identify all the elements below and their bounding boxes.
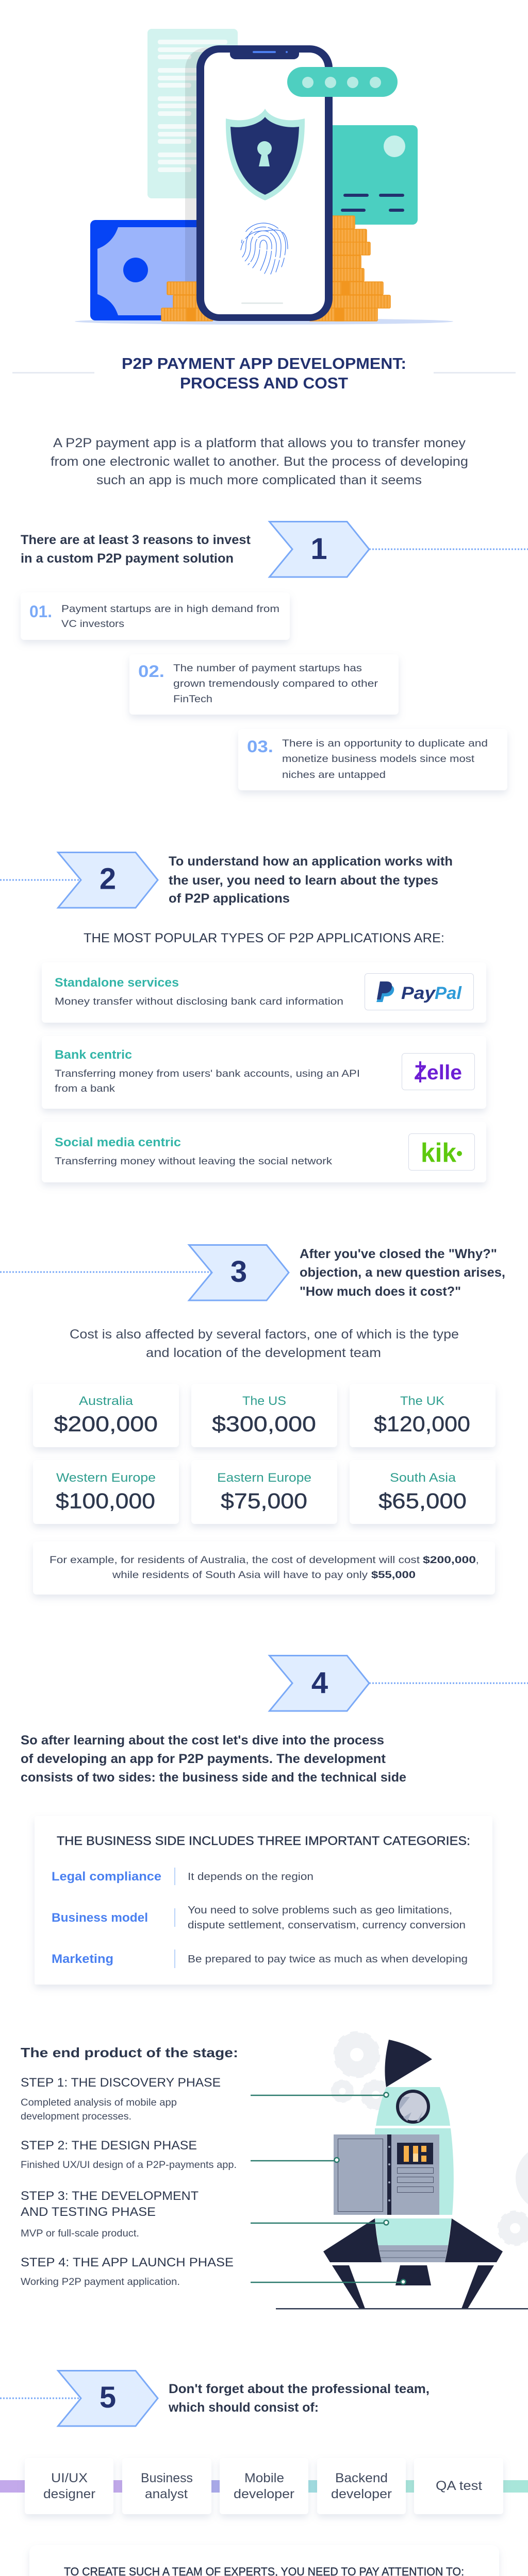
passcode pill (287, 67, 398, 97)
reason card 02: FinTech (173, 693, 212, 705)
section 3 lead: objection, a new question arises, (300, 1265, 505, 1280)
card: bank centric: Transferring money from users' bank accounts, using an API (55, 1068, 360, 1079)
step 1 (21, 2076, 221, 2122)
cost example callout: while residents of South Asia will have to pay only (112, 1569, 368, 1581)
cost card: Eastern Europe: Eastern Europe (217, 1471, 311, 1485)
row: marketing: Marketing (52, 1952, 113, 1966)
team card: Backend developer: Backend (335, 2471, 388, 2485)
section 4 marker: 4 (311, 1666, 328, 1700)
step 1: STEP 1: THE DISCOVERY PHASE (21, 2076, 221, 2090)
team card: Backend developer: developer (331, 2487, 392, 2501)
section 3 lead: "How much does it cost?" (300, 1284, 461, 1299)
cost card: The UK (350, 1384, 496, 1447)
section 1 marker (269, 521, 528, 577)
card: bank centric (42, 1036, 486, 1109)
cost card: South Asia: $65,000 (378, 1489, 467, 1513)
section 5 lead: Don't forget about the professional team, (169, 2382, 430, 2396)
cost card: Western Europe: Western Europe (56, 1471, 156, 1485)
row: business model: Business model (52, 1911, 148, 1925)
step 3: MVP or full-scale product. (21, 2228, 139, 2239)
cost intro: and location of the development team (146, 1346, 381, 1360)
cost card: The UK: The UK (400, 1394, 444, 1408)
reason card 03: There is an opportunity to duplicate and (282, 738, 488, 749)
ground line (276, 2308, 528, 2309)
rocket illustration (276, 2033, 528, 2309)
fins and legs (323, 2218, 503, 2309)
cost example callout (33, 1541, 495, 1595)
section 3 lead (300, 1247, 505, 1299)
reason card 03: 03. (247, 737, 273, 756)
panel: business side (35, 1816, 492, 1985)
section 1 lead: There are at least 3 reasons to invest (21, 533, 251, 547)
reason card 02 (129, 654, 399, 715)
cost card: Eastern Europe (191, 1460, 337, 1524)
gears (332, 2033, 528, 2244)
logo: PayPal (365, 974, 473, 1010)
logo: kik (408, 1133, 474, 1171)
reason card 02: 02. (138, 662, 164, 681)
team card: Backend developer (317, 2458, 406, 2514)
section 1 lead: in a custom P2P payment solution (21, 551, 234, 566)
step 3: STEP 3: THE DEVELOPMENT (21, 2189, 199, 2203)
step 3: AND TESTING PHASE (21, 2205, 156, 2219)
section 4 lead: So after learning about the cost let's dive into the process (21, 1733, 384, 1748)
team card: QA test (414, 2458, 503, 2514)
section 4 lead: of developing an app for P2P payments. The development (21, 1752, 386, 1766)
team card: UI/UX designer: UI/UX (51, 2471, 88, 2485)
step connector lines (251, 2093, 405, 2284)
section 3 lead: After you've closed the "Why?" (300, 1247, 497, 1261)
section 1 lead (21, 533, 251, 566)
fingerprint (241, 223, 288, 274)
team card: UI/UX designer (25, 2458, 113, 2514)
reason card 01: 01. (29, 602, 52, 621)
team card: UI/UX designer: designer (43, 2487, 95, 2501)
shield (226, 109, 305, 200)
card: standalone services (42, 962, 486, 1023)
step 1: Completed analysis of mobile app (21, 2097, 177, 2108)
receipt (147, 29, 238, 198)
logo: Zelle: Zelle (414, 1061, 462, 1084)
cost card: Eastern Europe: $75,000 (221, 1489, 307, 1513)
body (375, 2087, 454, 2245)
cost example callout: For example, for residents of Australia, the cost of development will cost (50, 1554, 420, 1566)
cost card: The US (191, 1384, 337, 1447)
team card: Mobile developer: Mobile (244, 2471, 284, 2485)
card: social media centric: Transferring money without leaving the social network (55, 1156, 332, 1167)
panel heading: THE BUSINESS SIDE INCLUDES THREE IMPORTANT CATEGORIES: (57, 1834, 470, 1848)
reason card 02: grown tremendously compared to other (173, 678, 378, 689)
row: legal compliance: Legal compliance (52, 1870, 161, 1884)
cost card: The US: The US (242, 1394, 286, 1408)
engine base (378, 2245, 448, 2262)
row: legal compliance (52, 1868, 314, 1885)
team card: QA test: QA test (436, 2479, 482, 2493)
section 5 lead: which should consist of: (168, 2400, 319, 2415)
cost card: South Asia (350, 1460, 496, 1524)
row: business model: You need to solve problems such as geo limitations, (188, 1905, 452, 1916)
intro text (51, 436, 468, 487)
section 5 lead (168, 2382, 430, 2415)
team card: Mobile developer (220, 2458, 308, 2514)
cost card: The US: $300,000 (212, 1412, 316, 1436)
cost card: South Asia: South Asia (390, 1471, 456, 1485)
section 2 lead: the user, you need to learn about the types (169, 873, 438, 888)
section 3 marker (0, 1245, 289, 1300)
card: bank centric: from a bank (55, 1083, 115, 1094)
section 4 lead: consists of two sides: the business side and the technical side (21, 1770, 406, 1785)
cost example callout: $55,000 (371, 1569, 416, 1581)
reason card 03: monetize business models since most (282, 753, 475, 765)
logo: PayPal: Pal (435, 984, 463, 1003)
cost example callout: , (476, 1554, 478, 1566)
section 2 lead: To understand how an application works with (169, 854, 453, 869)
title: PROCESS AND COST (180, 374, 348, 392)
card: standalone services: Money transfer without disclosing bank card information (55, 996, 343, 1007)
hero illustration: phone payment (75, 29, 453, 325)
section 2 lead: of P2P applications (169, 891, 290, 906)
bank card (289, 125, 418, 225)
logo: PayPal: Pay (401, 984, 436, 1003)
reason card 03 (238, 729, 507, 790)
window (398, 2091, 428, 2122)
section 2 marker: 2 (100, 862, 116, 895)
section 4 marker (269, 1656, 528, 1711)
reason card 01 (21, 592, 290, 640)
team card: Business analyst (122, 2458, 211, 2514)
intro text: from one electronic wallet to another. But the process of developing (51, 454, 468, 469)
team card: Mobile developer: developer (234, 2487, 294, 2501)
cost card: The UK: $120,000 (374, 1412, 470, 1436)
coin stacks (161, 216, 390, 321)
row: marketing (52, 1950, 468, 1968)
step 2: Finished UX/UI design of a P2P-payments app. (21, 2160, 237, 2171)
step 1: development processes. (21, 2111, 131, 2122)
heading: end product: The end product of the stage: (21, 2045, 238, 2060)
reason card 03: niches are untapped (282, 769, 386, 781)
card: standalone services: Standalone services (55, 976, 179, 990)
reason card 02: The number of payment startups has (173, 663, 362, 674)
section 4 lead (21, 1733, 406, 1785)
cost card: Australia: Australia (79, 1394, 134, 1408)
section 2 lead (169, 854, 453, 906)
reason card 01: VC investors (61, 618, 124, 630)
row: marketing: Be prepared to pay twice as much as when developing (188, 1954, 468, 1965)
phone drop shadow (185, 47, 217, 282)
cost intro (70, 1327, 459, 1360)
row: business model (52, 1905, 466, 1931)
card: social media centric: Social media centric (55, 1136, 181, 1149)
team ribbon (0, 2480, 528, 2493)
phone (196, 45, 333, 321)
row: business model: dispute settlement, conservatism, currency conversion (188, 1920, 466, 1931)
step 3 (21, 2189, 199, 2239)
banknote (90, 220, 214, 320)
step 4: Working P2P payment application. (21, 2277, 180, 2287)
step 2: STEP 2: THE DESIGN PHASE (21, 2139, 197, 2153)
cost card: Western Europe (33, 1460, 179, 1524)
section 1 marker: 1 (310, 532, 327, 566)
heading: popular types: THE MOST POPULAR TYPES OF P2P APPLICATIONS ARE: (84, 931, 444, 945)
title (12, 354, 516, 392)
step 4: STEP 4: THE APP LAUNCH PHASE (21, 2256, 234, 2269)
panel: team of experts (29, 2545, 499, 2576)
cost card: Australia (33, 1384, 179, 1447)
logo: kik: kik (421, 1138, 456, 1168)
reason card 01: Payment startups are in high demand from (61, 603, 279, 615)
team card: Business analyst: analyst (145, 2487, 188, 2501)
cost card: Western Europe: $100,000 (56, 1489, 155, 1513)
cost card: Australia: $200,000 (54, 1412, 158, 1436)
step 2 (21, 2139, 237, 2171)
cost intro: Cost is also affected by several factors, one of which is the type (70, 1327, 459, 1342)
card: bank centric: Bank centric (55, 1048, 132, 1062)
section 2 marker (0, 852, 158, 908)
row: legal compliance: It depends on the region (188, 1871, 314, 1883)
shadow ellipse (75, 318, 453, 325)
cost example callout: $200,000 (423, 1554, 476, 1566)
section 5 marker: 5 (100, 2381, 116, 2414)
door panel (334, 2134, 439, 2215)
intro text: such an app is much more complicated than it seems (96, 473, 422, 487)
section 5 marker (0, 2371, 158, 2426)
card: social media centric (42, 1122, 486, 1182)
nose (385, 2040, 432, 2087)
logo: Zelle (402, 1053, 474, 1090)
team card: Business analyst: Business (141, 2471, 193, 2485)
section 3 marker: 3 (230, 1255, 247, 1289)
title: P2P PAYMENT APP DEVELOPMENT: (122, 354, 406, 372)
intro text: A P2P payment app is a platform that allows you to transfer money (53, 436, 466, 450)
step 4 (21, 2256, 234, 2287)
